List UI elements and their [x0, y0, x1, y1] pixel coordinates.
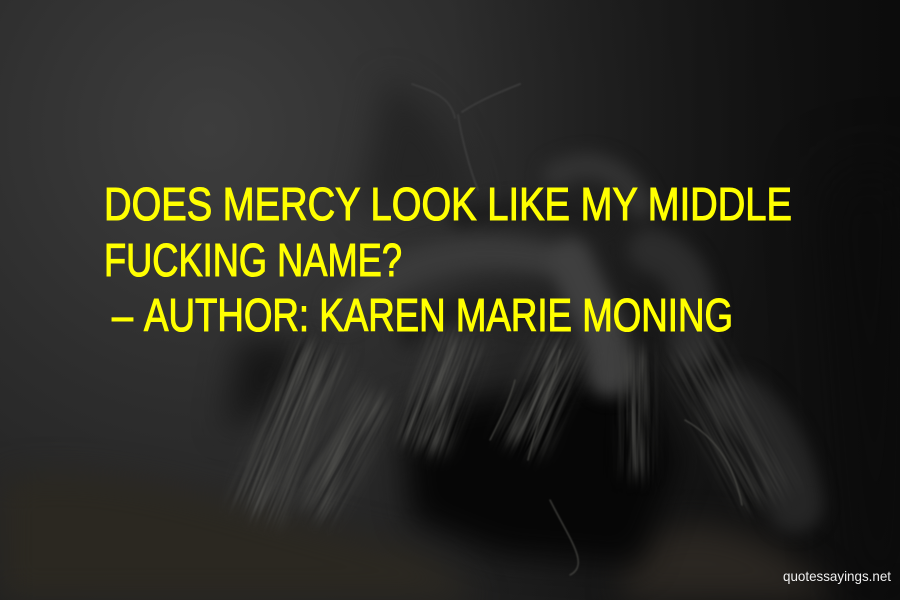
rope strands	[345, 166, 795, 505]
loose thin fibres	[412, 84, 742, 575]
brown wooden floor	[0, 474, 480, 600]
right-side dark	[830, 160, 900, 600]
black core under the bundle	[400, 370, 680, 565]
watermark: quotessayings.net	[783, 568, 891, 584]
quote text	[104, 178, 792, 341]
quote line 2: FUCKING NAME?	[104, 234, 402, 286]
frayed fibres	[233, 337, 347, 523]
author attribution: AUTHOR: KAREN MARIE MONING	[144, 289, 733, 341]
rope bundle photo	[233, 84, 796, 575]
author dash: –	[112, 289, 133, 341]
